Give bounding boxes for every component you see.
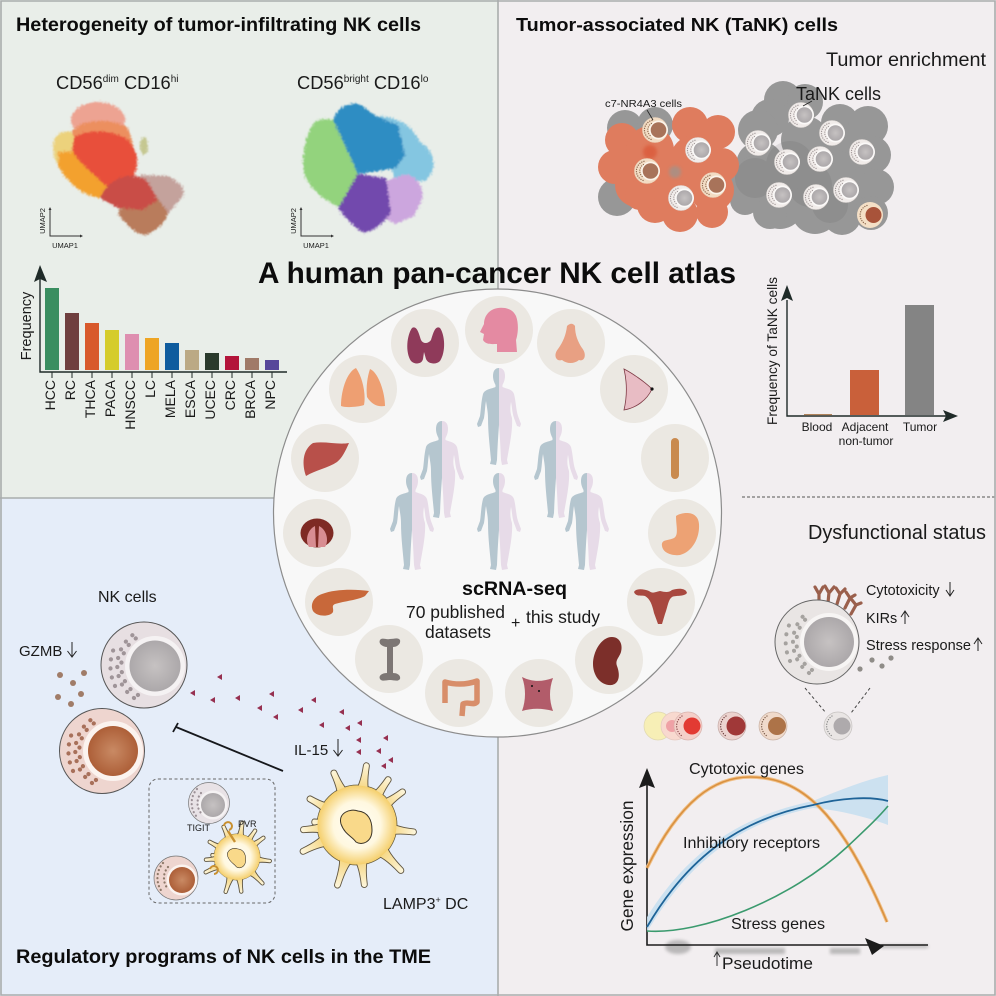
text: 70 published datasets: datasets [425,622,491,642]
arrow: inhibition line [173,723,283,771]
icon: uterus [634,589,687,624]
icon: nose [555,324,585,363]
bar chart: NK cell frequency by cancer type: BRCA [242,379,258,419]
label: KIRs up: KIRs [866,611,897,627]
icon: kidney [593,637,622,685]
UMAP axes: CD56dim: UMAP2 [38,208,47,234]
bar chart: frequency of TaNK cells: Tumor [903,420,937,434]
label: NK cells: NK cells [98,589,157,606]
label: LAMP3 DC: + [435,895,441,905]
bar chart: NK cell frequency by cancer type: HCC [42,380,58,410]
icon: differentiation trajectory cells [644,712,852,740]
label: CD56bright CD16lo: bright [344,74,369,85]
bar chart: NK cell frequency by cancer type: LC [142,380,158,398]
text: plus this study [511,607,600,632]
bar chart: NK cell frequency by cancer type [19,265,287,430]
bar chart: NK cell frequency by cancer type: THCA [82,379,98,418]
panel: heterogeneity of tumor-infiltrating NK cells [0,0,498,498]
icon: pancreas [312,590,369,616]
bar chart: frequency of TaNK cells: Adjacent [842,420,889,434]
organ circle backgrounds [283,296,716,727]
inset: TIGIT PVR interaction [149,779,275,903]
watermark smudges [665,940,928,954]
bar chart: frequency of TaNK cells [765,277,958,448]
subheading: dysfunctional status: Dysfunctional status [808,522,986,544]
subheading: tumor enrichment: Tumor enrichment [826,49,987,71]
panel: regulatory programs of NK cells [0,498,498,996]
UMAP axes: CD56dim: UMAP1 [52,241,78,250]
icon: tonsil [300,518,334,548]
line chart: gene expression over pseudotime [617,761,928,973]
icon: colon [445,681,477,716]
line chart: gene expression over pseudotime: Gene expression [617,800,637,932]
text: plus this study: this study [526,607,600,627]
heading: TaNK cells: Tumor-associated NK (TaNK) cells [516,14,838,35]
icon: spleen bar [671,438,679,479]
bar chart: NK cell frequency by cancer type: ESCA [182,379,198,418]
label: LAMP3 DC: DC [441,896,468,913]
icon: nipple [650,387,654,391]
icon: released granules [857,655,894,672]
label: IL-15 decrease [294,739,342,759]
label: TIGIT: TIGIT [187,823,210,833]
label: CD56dim CD16hi: dim [103,74,119,85]
icon: IL-15 triangles [190,674,393,769]
icon: lungs [341,368,385,407]
UMAP: CD56dim clusters [53,102,184,235]
UMAP: CD56bright clusters [303,104,434,232]
panel: dysfunctional status [498,497,996,996]
bar chart: frequency of TaNK cells: Blood [802,420,832,434]
title: A human pan-cancer NK cell atlas [258,257,736,290]
line chart: gene expression over pseudotime: Cytotoxic genes [689,761,804,778]
icon: thyroid [407,327,444,363]
icon: stomach [662,513,699,555]
divider: dashed separator [742,496,996,498]
bar chart: NK cell frequency by cancer type: UCEC [202,380,218,420]
label: CD56dim CD16hi: CD16 [119,72,171,93]
label: PVR: PVR [238,819,257,829]
icon: mini brown NK cell [154,856,198,900]
label: LAMP3 DC: LAMP3 [383,896,435,913]
illustration: orange tumor cluster [598,107,739,232]
UMAP: olive speckle cluster [140,137,148,155]
bar chart: NK cell frequency by cancer type: CRC [222,380,238,410]
icon: brown NK cell [60,708,144,794]
icon: LAMP3 dendritic cell [297,762,417,890]
line chart: gene expression over pseudotime: Pseudotime [722,954,813,973]
label: c7-NR4A3 cells: c7-NR4A3 cells [605,98,682,110]
text: 70 published datasets: 70 published [406,602,505,622]
label: GZMB decrease: GZMB [19,643,62,660]
icon: granzyme granules [55,670,87,707]
label: cytotoxicity down: Cytotoxicity [866,583,940,599]
line chart: gene expression over pseudotime: Stress genes [731,916,825,933]
label: CD56bright CD16lo: lo [421,74,429,85]
icon: gray NK cell [101,622,187,708]
label: TaNK cells: TaNK cells [796,84,881,104]
bar chart: NK cell frequency by cancer type: RC [62,380,78,400]
icon: dysfunctional NK cell with receptors [775,586,861,684]
icon: head [480,308,518,352]
line chart: gene expression over pseudotime: Inhibitory receptors [683,835,820,852]
illustration: gray tumor cluster [598,81,894,235]
label: CD56bright CD16lo: CD16 [369,72,421,93]
icon: liver [304,442,349,476]
bar chart: NK cell frequency by cancer type: MELA [162,379,178,418]
icon: mini dendritic cell [202,820,272,895]
bar chart: NK cell frequency by cancer type: NPC [262,380,278,410]
text: plus this study: + [511,615,520,632]
icon: breast [624,369,652,410]
UMAP axes: CD56bright: UMAP2 [289,208,298,234]
icon: intratumoral immune cells [634,102,883,228]
bar chart: frequency of TaNK cells: non-tumor [839,434,893,448]
bar chart: NK cell frequency by cancer type: PACA [102,379,118,417]
panel: tumor-associated NK cells [498,0,996,498]
icon: bone [380,638,400,681]
label: IL-15 decrease: IL-15 [294,742,328,759]
label: CD56dim CD16hi: CD56 [56,72,103,93]
text: 70 published datasets [406,602,505,642]
UMAP axes: CD56dim [38,207,83,250]
UMAP axes: CD56bright [289,207,334,250]
bar chart: frequency of TaNK cells: Frequency of TaNK cells [765,277,780,425]
heading: heterogeneity: Heterogeneity of tumor-infiltrating NK cells [16,15,421,36]
bar chart: NK cell frequency by cancer type: HNSCC [122,380,138,430]
central circle: atlas [274,289,722,737]
human figures [390,368,609,570]
heading: regulatory programs: Regulatory programs of NK cells in the TME [16,947,431,968]
label: CD56dim CD16hi: hi [171,74,178,85]
label: c7-NR4A3 cells [605,98,682,120]
callout: zoom lines to cell [805,688,870,713]
label: stress response up: Stress response [866,638,971,654]
heading: scRNA-seq: scRNA-seq [462,578,567,600]
bar chart: NK cell frequency by cancer type: Frequency [19,291,35,360]
icon: skin [522,677,553,711]
label: CD56bright CD16lo: CD56 [297,72,344,93]
icon: mini gray NK cell [188,782,230,824]
UMAP axes: CD56bright: UMAP1 [303,241,329,250]
